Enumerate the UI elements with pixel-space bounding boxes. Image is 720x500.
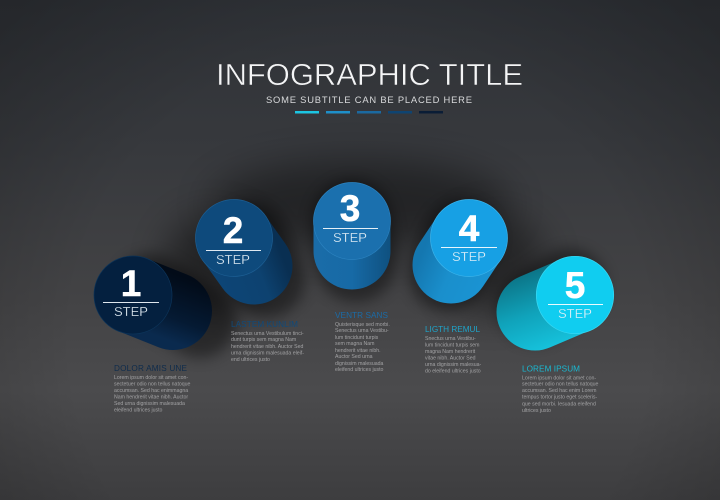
step 4 cylinder xyxy=(430,200,508,276)
step 3 cylinder xyxy=(314,182,390,260)
step 1 text: accumsan. Sed hac enimmagna xyxy=(114,388,188,394)
step 5 text: ultrices justo xyxy=(522,408,551,414)
step 2 text: Senectus urna Vestibulum tinci- xyxy=(231,331,304,337)
step 4 text: urna dignissim malesua- xyxy=(425,362,481,368)
step 4 text xyxy=(425,325,481,374)
step 3 text: sem magna Nam xyxy=(335,341,374,347)
step 5 text: accumsan. Sed hac enim Lorem xyxy=(522,388,596,394)
step 3 text: Auctor Sed urna xyxy=(335,354,373,360)
step 3 cylinder: STEP xyxy=(333,230,367,245)
step 1 cylinder: 1 xyxy=(121,263,141,304)
step 2 text: urna dignissim malesuada eleif- xyxy=(231,350,304,356)
step 1 text: eleifend ultrices justo xyxy=(114,408,163,414)
step 5 text: Lorem ipsum dolor sit amet con- xyxy=(522,375,596,381)
step 2 text: LASTEM KUNLIM xyxy=(231,320,298,329)
step 4 text: lum tincidunt turpis sem xyxy=(425,342,480,348)
step 4 cylinder: 4 xyxy=(459,208,480,249)
step 3 text: dignissim malesuada xyxy=(335,361,384,367)
cylinder shadows xyxy=(150,160,570,322)
step 2 cylinder: STEP xyxy=(216,252,250,267)
step 3 text xyxy=(335,311,390,373)
step 4 text: do eleifend ultrices justo xyxy=(425,368,481,374)
step 1 text: Sed urna dignissim malesuada xyxy=(114,401,185,407)
step 4 cylinder: STEP xyxy=(452,249,486,264)
step 5 text: LOREM IPSUM xyxy=(522,364,580,374)
step 5 cylinder xyxy=(535,256,614,334)
step 4 text: vitae nibh. Auctor Sed xyxy=(425,355,476,361)
step 3 text: hendrerit vitae nibh. xyxy=(335,348,381,354)
step 3 text: lum tincidunt turpis xyxy=(335,335,379,341)
step 1 cylinder: STEP xyxy=(114,304,148,319)
step 2 text: end ultrices justo xyxy=(231,357,270,363)
step 1 text: DOLOR AMIS UNE xyxy=(114,364,188,373)
step 5 text xyxy=(522,364,599,414)
step 3 text: VENTR SANS xyxy=(335,311,389,320)
step 5 cylinder: 5 xyxy=(565,265,585,306)
step 2 text xyxy=(231,320,304,363)
step 2 cylinder xyxy=(196,200,272,276)
step 4 text: magna Nam hendrerit xyxy=(425,349,476,355)
step 1 text: Nam hendrerit vitae nibh. Auctor xyxy=(114,394,188,400)
step 1 text: sectetuer odio non tellus natoque xyxy=(114,382,191,388)
step 3 text: Senectus urna Vestibu- xyxy=(335,328,389,334)
step 5 text: tempus tortor justo eget sceleris- xyxy=(522,395,598,401)
step 3 cylinder: 3 xyxy=(340,188,360,229)
step 2 cylinder: 2 xyxy=(223,210,243,251)
step 3 text: eleifend ultrices justo xyxy=(335,367,384,373)
step 5 text: sectetuer odio non tellus natoque xyxy=(522,382,599,388)
step 4 text: LIGTH REMUL xyxy=(425,325,480,334)
step 2 text: hendrerit vitae nibh. Auctor Sed xyxy=(231,344,303,350)
step 5 text: que sed morbi. Iesuada eleifend xyxy=(522,401,596,407)
step 1 cylinder xyxy=(94,256,173,334)
step 1 text xyxy=(114,364,191,414)
step 1 text: Lorem ipsum dolor sit amet con- xyxy=(114,375,188,381)
subtitle: SOME SUBTITLE CAN BE PLACED HERE xyxy=(266,94,472,105)
step 3 text: Quisterisque sed morbi. xyxy=(335,322,390,328)
step 2 text: dunt turpis sem magna Nam xyxy=(231,337,296,343)
step 4 text: Snectus urna Vestibu- xyxy=(425,336,476,342)
accent bars xyxy=(295,111,443,114)
title: INFOGRAPHIC TITLE xyxy=(216,57,523,92)
step 5 cylinder: STEP xyxy=(558,306,592,321)
